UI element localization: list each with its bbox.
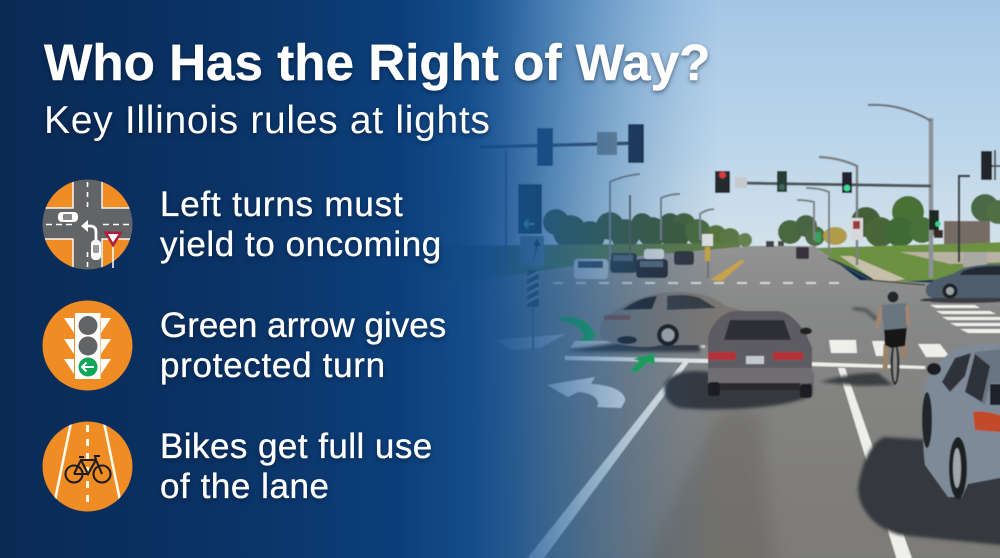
grey sedan in lane — [708, 311, 812, 398]
asphalt patch — [640, 410, 775, 558]
far tree line — [543, 194, 1000, 251]
subtitle: Key Illinois rules at lights — [44, 99, 491, 142]
text: left turns: yield to oncoming — [160, 225, 442, 264]
text: bikes: of the lane — [160, 467, 330, 506]
sidewalk — [840, 256, 905, 284]
icon: green arrow traffic light — [42, 300, 132, 390]
far cars — [574, 241, 809, 279]
left turn road marking — [547, 377, 625, 408]
icon: left turn yield intersection — [42, 180, 132, 270]
icon: bike lane — [42, 422, 132, 512]
foreground mast arm and signals — [480, 124, 644, 350]
blue car at right — [920, 264, 1000, 303]
street light poles — [610, 105, 970, 278]
sky — [0, 0, 1000, 255]
text: green arrow — [160, 306, 447, 386]
right grass — [815, 242, 1000, 283]
stop line and lane lines — [518, 340, 950, 558]
road surface — [0, 246, 1000, 558]
text: bikes: Bikes get full use — [160, 427, 433, 466]
traffic island — [495, 334, 566, 350]
curb — [828, 258, 925, 285]
building — [944, 221, 990, 245]
title: Who Has the Right of Way? — [44, 34, 710, 91]
signal heads — [715, 151, 992, 238]
bronze sedan turning — [600, 292, 745, 347]
text: bikes — [160, 427, 433, 506]
text: green arrow: Green arrow gives — [160, 306, 446, 345]
cyclist — [820, 292, 908, 386]
green turn arrows — [558, 317, 655, 372]
text: left turns: Left turns must — [160, 185, 403, 224]
yellow median — [710, 260, 745, 281]
far crosswalk dashes — [530, 282, 850, 284]
left grass — [0, 243, 740, 285]
text: green arrow: protected turn — [160, 346, 386, 385]
text: left turns — [160, 185, 442, 268]
silver car foreground — [922, 344, 1000, 499]
right crosswalk stripes — [922, 300, 1000, 333]
car shadows — [566, 342, 1000, 546]
mast arm right — [740, 183, 931, 186]
roadside signs — [702, 218, 987, 278]
